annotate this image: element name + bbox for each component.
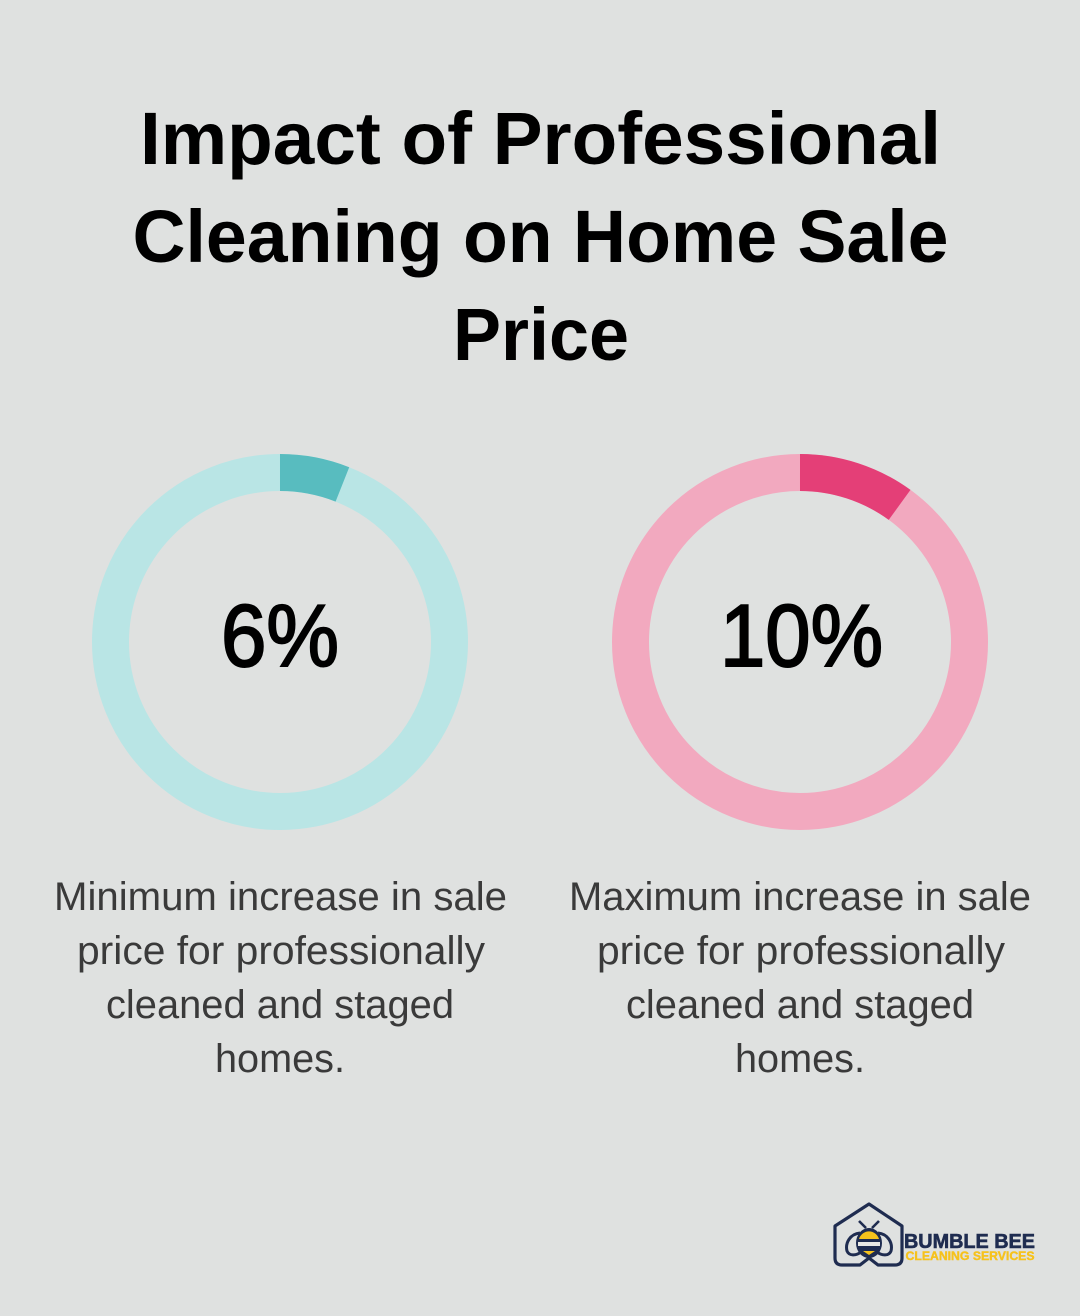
title: Price xyxy=(453,293,629,376)
caption: maximum increase: cleaned and staged xyxy=(626,983,974,1027)
donut chart: 6%: 6% xyxy=(221,586,339,685)
logo wordmark xyxy=(904,1231,1035,1263)
caption: maximum increase: Maximum increase in sale xyxy=(569,875,1031,919)
caption: maximum increase xyxy=(569,875,1031,1081)
logo: Bumble Bee Cleaning Services xyxy=(835,1204,1035,1265)
logo wordmark: CLEANING SERVICES xyxy=(906,1249,1034,1263)
title: Impact of Professional xyxy=(140,97,941,180)
caption: minimum increase: price for professionally xyxy=(77,929,485,973)
donut chart: 10%: 10% xyxy=(720,586,883,685)
title: Cleaning on Home Sale xyxy=(132,195,948,278)
caption: maximum increase: price for professionally xyxy=(597,929,1005,973)
caption: maximum increase: homes. xyxy=(735,1037,865,1081)
caption: minimum increase: cleaned and staged xyxy=(106,983,454,1027)
donut chart: 6% xyxy=(110,472,450,812)
title xyxy=(132,97,948,376)
caption: minimum increase: homes. xyxy=(215,1037,345,1081)
logo wordmark: BUMBLE BEE xyxy=(904,1231,1035,1253)
donut chart: 10% xyxy=(630,472,970,812)
caption: minimum increase: Minimum increase in sale xyxy=(54,875,507,919)
caption: minimum increase xyxy=(54,875,507,1081)
icon: house with bee xyxy=(835,1204,902,1265)
